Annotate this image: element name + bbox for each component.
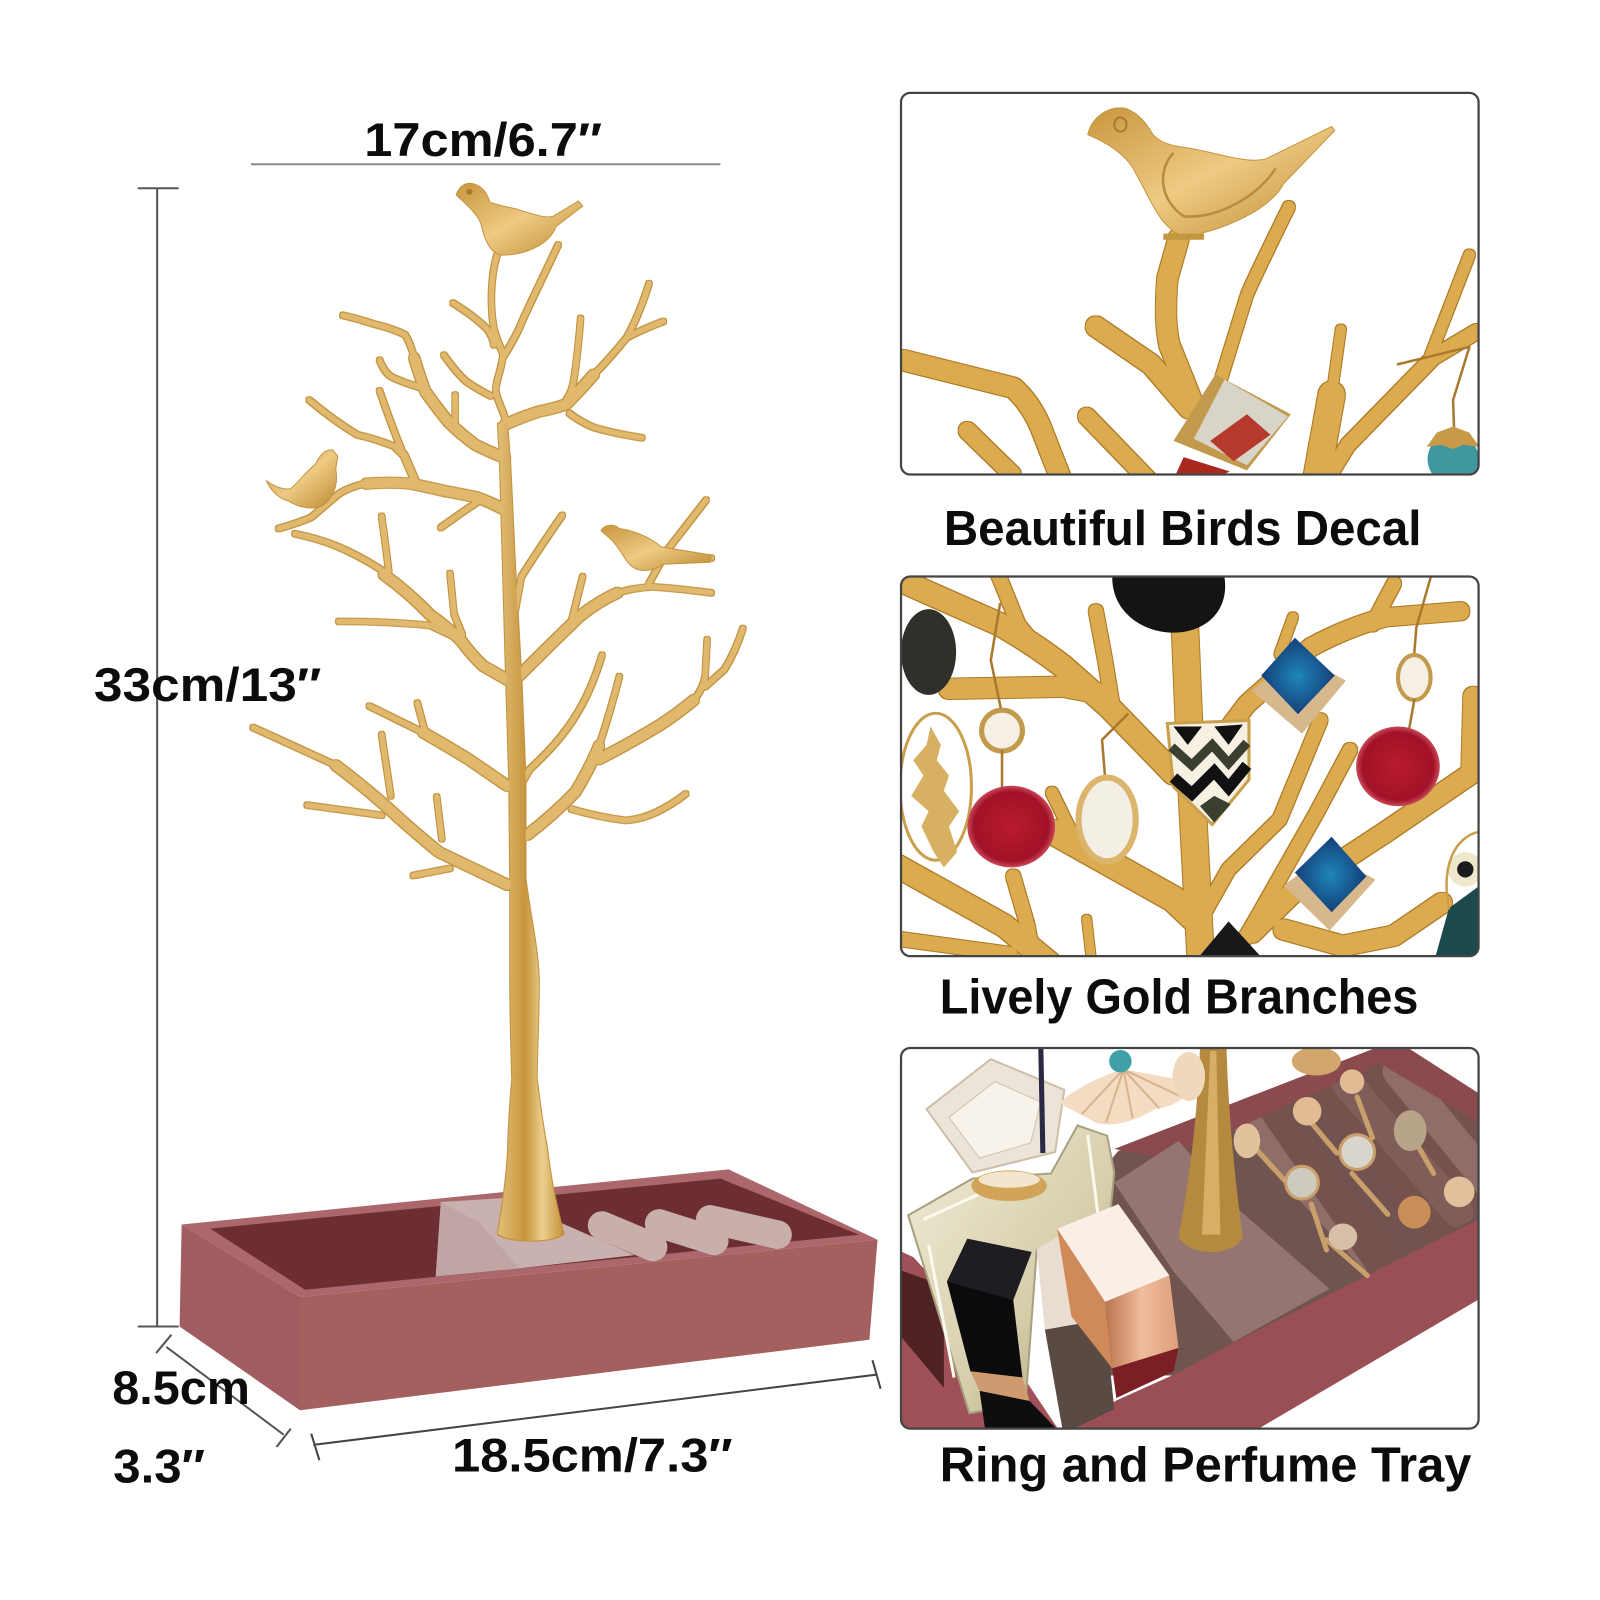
bird: right [601, 525, 711, 570]
bird: left [266, 450, 338, 508]
tree lower limbs [336, 574, 694, 885]
black round earrings [901, 578, 1225, 695]
tray front wall [1076, 1220, 1478, 1428]
tree trunk [498, 423, 563, 1241]
ring rolls [1234, 1064, 1478, 1272]
gold tree [253, 183, 743, 1241]
panel: ring and perfume tray [898, 1047, 1490, 1434]
caption: lively gold branches: Lively Gold Branches [940, 970, 1418, 1024]
tray front side [300, 1240, 878, 1410]
gold branches with earrings [898, 571, 1473, 964]
depth dimension: 8.5cm / 3.3 inch: 8.5cm [112, 1362, 250, 1414]
tray rim [182, 1169, 878, 1297]
lipstick [947, 1239, 1061, 1434]
tree upper branches [279, 245, 663, 638]
tray back rim [1114, 1048, 1480, 1158]
tree lower branches [253, 500, 743, 876]
caption: ring and perfume tray: Ring and Perfume Tray [940, 1439, 1471, 1493]
perfume bottle [908, 1126, 1114, 1413]
hoop leaf earring [900, 713, 971, 867]
chevron earring [1167, 720, 1249, 824]
blue diamond earring top [1252, 638, 1346, 734]
large gold branches [903, 207, 1477, 480]
pearl and pompom earring right [1356, 578, 1440, 806]
owl earring [1436, 831, 1478, 955]
depth dimension: 8.5cm / 3.3 inch: 3.3″ [113, 1441, 205, 1493]
infographic canvas [95, 92, 1480, 1492]
tray inner back wall [210, 1179, 859, 1290]
tray left side [180, 1224, 300, 1410]
large gold bird [1088, 108, 1335, 237]
tree trunk [1179, 1048, 1243, 1252]
tray base [180, 1169, 878, 1410]
panel: beautiful birds decal [901, 93, 1480, 485]
blue diamond earring bottom [1284, 837, 1376, 931]
rose gold compact [1057, 1204, 1179, 1398]
height dimension: 33cm: 33cm/13″ [94, 659, 321, 711]
turquoise earring [1398, 347, 1480, 485]
panel: lively gold branches [898, 571, 1485, 964]
height dimension: 33cm [94, 188, 321, 1327]
caption: beautiful birds decal: Beautiful Birds Decal [944, 502, 1421, 556]
box packaging [1037, 1236, 1114, 1434]
perfume stopper and neck [927, 1059, 1064, 1201]
ring with red gem [1173, 374, 1291, 480]
black triangle earring [1200, 921, 1260, 955]
bird: top [456, 183, 583, 255]
velvet block [1114, 1141, 1330, 1342]
velvet block [436, 1198, 635, 1277]
length dimension: 18.5cm [311, 1360, 881, 1481]
length dimension: 18.5cm: 18.5cm/7.3″ [452, 1429, 733, 1481]
width dimension: 17cm: 17cm/6.7″ [364, 114, 602, 166]
tree upper limbs [366, 358, 594, 510]
depth dimension: 8.5cm / 3.3 inch [112, 1335, 291, 1493]
pearl hoop earring [1079, 714, 1136, 861]
tray interior base [1058, 1123, 1478, 1376]
tray corner front left [898, 1250, 1061, 1434]
pearl and pompom earring left [967, 604, 1055, 867]
rings on rolls [1234, 1047, 1474, 1276]
fan earring [1041, 1048, 1205, 1153]
ring rolls [602, 1219, 778, 1247]
